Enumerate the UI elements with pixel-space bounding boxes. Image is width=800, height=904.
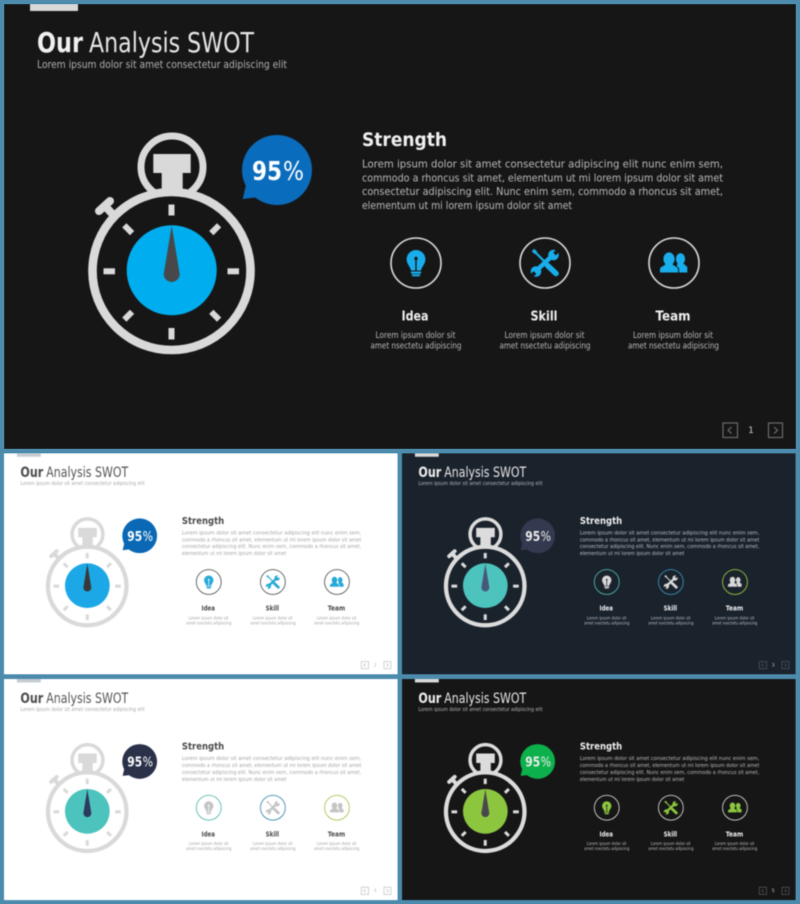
item: Skill: amet nsectetu adipiscing bbox=[648, 846, 694, 851]
item: Skill: Lorem ipsum dolor sit bbox=[253, 615, 293, 620]
item: Team: amet nsectetu adipiscing bbox=[712, 621, 758, 626]
item: Team: Team bbox=[726, 830, 743, 838]
item: Skill bbox=[648, 570, 694, 626]
text block: description: elementum ut mi lorem ipsum dolor sit amet bbox=[580, 551, 684, 557]
subtitle: Lorem ipsum dolor sit amet consectetur adipiscing elit bbox=[20, 481, 145, 487]
pager: 5 bbox=[772, 888, 775, 894]
subtitle: Lorem ipsum dolor sit amet consectetur adipiscing elit bbox=[418, 707, 543, 713]
title bbox=[20, 465, 129, 481]
title: Our bbox=[418, 465, 441, 481]
item: Idea: Lorem ipsum dolor sit bbox=[376, 331, 456, 341]
item: Idea: amet nsectetu adipiscing bbox=[584, 846, 630, 851]
title bbox=[20, 691, 129, 707]
item: Skill bbox=[648, 795, 694, 851]
item: Idea: Lorem ipsum dolor sit bbox=[587, 841, 627, 846]
pager bbox=[759, 887, 789, 894]
item: Idea: Lorem ipsum dolor sit bbox=[189, 841, 229, 846]
panel: dark slide with green accent bbox=[402, 679, 796, 900]
item: Skill: Skill bbox=[664, 830, 677, 838]
item: Skill: Skill bbox=[530, 308, 558, 324]
title: Our bbox=[20, 691, 43, 707]
item: Idea: Idea bbox=[202, 830, 215, 838]
callout: 95% bubble bbox=[242, 135, 312, 205]
item: Skill: Lorem ipsum dolor sit bbox=[504, 331, 585, 341]
callout: 95% bubble: 95 bbox=[525, 530, 540, 545]
item: Team bbox=[314, 570, 360, 626]
text block: description bbox=[182, 756, 362, 783]
text block: description: Lorem ipsum dolor sit amet consectetur adipiscing elit nunc enim sem, bbox=[182, 756, 362, 762]
text block: description: commodo a rhoncus sit amet, elementum ut mi lorem ipsum dolor sit amet bbox=[362, 172, 723, 184]
item: Skill: Skill bbox=[266, 605, 279, 613]
text block: description: Lorem ipsum dolor sit amet consectetur adipiscing elit nunc enim sem, bbox=[182, 531, 362, 537]
icon: stopwatch bbox=[48, 745, 126, 851]
text block: description bbox=[580, 756, 760, 783]
tab marker bbox=[17, 679, 41, 682]
item: Skill: amet nsectetu adipiscing bbox=[250, 621, 296, 626]
item: Team: Lorem ipsum dolor sit bbox=[715, 841, 755, 846]
callout: 95% bubble: % bbox=[143, 755, 153, 770]
text block: description: consectetur adipiscing elit. Nunc enim sem, commodo a rhoncus sit amet, bbox=[580, 770, 760, 776]
title: Our bbox=[20, 465, 43, 481]
pager bbox=[361, 887, 391, 894]
heading: Strength: Strength bbox=[580, 742, 622, 753]
item: Team bbox=[712, 570, 758, 626]
callout: 95% bubble: 95 bbox=[127, 755, 142, 770]
item: Idea: Lorem ipsum dolor sit bbox=[587, 615, 627, 620]
item: Idea: amet nsectetu adipiscing bbox=[370, 342, 462, 352]
tab marker bbox=[17, 453, 41, 457]
callout: 95% bubble: % bbox=[283, 157, 304, 187]
item: Idea: amet nsectetu adipiscing bbox=[186, 621, 232, 626]
text block: description bbox=[362, 158, 723, 212]
item: Skill bbox=[500, 238, 590, 352]
panel: large dark slide with blue accent bbox=[4, 4, 796, 449]
heading: Strength: Strength bbox=[182, 742, 224, 753]
heading: Strength: Strength bbox=[182, 516, 224, 527]
item: Team: Lorem ipsum dolor sit bbox=[317, 615, 357, 620]
pager bbox=[759, 662, 789, 669]
text block: description bbox=[580, 531, 760, 557]
item: Idea bbox=[584, 795, 630, 851]
tab marker bbox=[415, 453, 439, 457]
title bbox=[37, 26, 255, 59]
callout: 95% bubble bbox=[122, 518, 157, 553]
pager: 3 bbox=[772, 663, 775, 669]
item: Skill: amet nsectetu adipiscing bbox=[500, 342, 590, 352]
callout: 95% bubble bbox=[520, 744, 555, 779]
subtitle: Lorem ipsum dolor sit amet consectetur adipiscing elit bbox=[20, 707, 145, 713]
item: Team: Team bbox=[328, 605, 345, 613]
title bbox=[418, 465, 527, 481]
item: Team: Lorem ipsum dolor sit bbox=[715, 615, 755, 620]
item: Idea bbox=[370, 238, 462, 352]
item: Idea: Lorem ipsum dolor sit bbox=[189, 615, 229, 620]
panel: white slide with teal accent bbox=[4, 679, 398, 900]
text block: description: commodo a rhoncus sit amet, elementum ut mi lorem ipsum dolor sit amet bbox=[580, 763, 759, 769]
icon: stopwatch bbox=[92, 136, 250, 350]
item: Skill: Skill bbox=[664, 605, 677, 613]
pager: 4 bbox=[374, 888, 377, 894]
title bbox=[418, 691, 527, 707]
callout: 95% bubble: 95 bbox=[127, 530, 142, 545]
text block: description: consectetur adipiscing elit. Nunc enim sem, commodo a rhoncus sit amet, bbox=[182, 770, 362, 776]
subtitle: Lorem ipsum dolor sit amet consectetur adipiscing elit bbox=[418, 481, 543, 487]
icon: stopwatch bbox=[446, 519, 524, 625]
item: Team bbox=[712, 795, 758, 851]
pager: 1 bbox=[748, 426, 754, 436]
callout: 95% bubble bbox=[520, 518, 555, 553]
item: Skill: Lorem ipsum dolor sit bbox=[651, 841, 691, 846]
item: Idea: Idea bbox=[600, 830, 613, 838]
text block: description: Lorem ipsum dolor sit amet consectetur adipiscing elit nunc enim sem, bbox=[580, 531, 760, 537]
title: Analysis SWOT bbox=[89, 26, 255, 59]
text block: description: Lorem ipsum dolor sit amet consectetur adipiscing elit nunc enim sem, bbox=[362, 158, 723, 170]
callout: 95% bubble: % bbox=[541, 530, 551, 545]
item: Skill: amet nsectetu adipiscing bbox=[648, 621, 694, 626]
text block: description: commodo a rhoncus sit amet, elementum ut mi lorem ipsum dolor sit amet bbox=[182, 538, 361, 544]
icon: stopwatch bbox=[446, 745, 524, 851]
pager bbox=[361, 662, 391, 669]
item: Team: Lorem ipsum dolor sit bbox=[633, 331, 714, 341]
panel: navy slide with teal accent bbox=[402, 453, 796, 674]
callout: 95% bubble: 95 bbox=[252, 157, 282, 187]
item: Team: Lorem ipsum dolor sit bbox=[317, 841, 357, 846]
title: Analysis SWOT bbox=[444, 691, 527, 707]
item: Team: amet nsectetu adipiscing bbox=[628, 342, 719, 352]
text block: description: Lorem ipsum dolor sit amet consectetur adipiscing elit nunc enim sem, bbox=[580, 756, 760, 762]
callout: 95% bubble bbox=[122, 744, 157, 779]
text block: description: commodo a rhoncus sit amet, elementum ut mi lorem ipsum dolor sit amet bbox=[182, 763, 361, 769]
panel: white slide with blue accent bbox=[4, 453, 398, 674]
item: Skill bbox=[250, 795, 296, 851]
pager bbox=[723, 423, 782, 438]
item: Idea: Idea bbox=[202, 605, 215, 613]
item: Team bbox=[314, 795, 360, 851]
item: Team: amet nsectetu adipiscing bbox=[314, 621, 360, 626]
pager: 2 bbox=[374, 663, 377, 669]
item: Skill bbox=[250, 570, 296, 626]
text block: description: elementum ut mi lorem ipsum dolor sit amet bbox=[362, 200, 572, 212]
text block: description: consectetur adipiscing elit. Nunc enim sem, commodo a rhoncus sit amet, bbox=[182, 544, 362, 550]
text block: description bbox=[182, 531, 362, 557]
title: Analysis SWOT bbox=[444, 465, 527, 481]
item: Idea: amet nsectetu adipiscing bbox=[186, 846, 232, 851]
item: Team: Team bbox=[656, 308, 690, 324]
item: Team: Team bbox=[328, 830, 345, 838]
text block: description: consectetur adipiscing elit. Nunc enim sem, commodo a rhoncus sit amet, bbox=[580, 544, 760, 550]
title: Analysis SWOT bbox=[46, 691, 129, 707]
title: Analysis SWOT bbox=[46, 465, 129, 481]
item: Skill: Lorem ipsum dolor sit bbox=[651, 615, 691, 620]
text block: description: elementum ut mi lorem ipsum dolor sit amet bbox=[182, 777, 286, 783]
icon: stopwatch bbox=[48, 519, 126, 625]
callout: 95% bubble: % bbox=[541, 755, 551, 770]
item: Skill: Skill bbox=[266, 830, 279, 838]
heading: Strength: Strength bbox=[580, 516, 622, 527]
heading: Strength: Strength bbox=[362, 129, 447, 151]
callout: 95% bubble: 95 bbox=[525, 755, 540, 770]
text block: description: commodo a rhoncus sit amet, elementum ut mi lorem ipsum dolor sit amet bbox=[580, 538, 759, 544]
item: Idea bbox=[186, 570, 232, 626]
item: Team: amet nsectetu adipiscing bbox=[314, 846, 360, 851]
item: Idea: Idea bbox=[600, 605, 613, 613]
text block: description: elementum ut mi lorem ipsum dolor sit amet bbox=[182, 551, 286, 557]
item: Skill: Lorem ipsum dolor sit bbox=[253, 841, 293, 846]
item: Idea: Idea bbox=[402, 308, 428, 324]
title: Our bbox=[418, 691, 441, 707]
item: Team bbox=[628, 238, 719, 352]
item: Team: amet nsectetu adipiscing bbox=[712, 846, 758, 851]
subtitle: Lorem ipsum dolor sit amet consectetur adipiscing elit bbox=[37, 59, 287, 71]
title: Our bbox=[37, 26, 83, 59]
item: Idea: amet nsectetu adipiscing bbox=[584, 621, 630, 626]
text block: description: elementum ut mi lorem ipsum dolor sit amet bbox=[580, 777, 684, 783]
item: Team: Team bbox=[726, 605, 743, 613]
text block: description: consectetur adipiscing elit. Nunc enim sem, commodo a rhoncus sit amet, bbox=[362, 186, 723, 198]
item: Idea bbox=[584, 570, 630, 626]
callout: 95% bubble: % bbox=[143, 530, 153, 545]
tab marker bbox=[415, 679, 439, 682]
item: Idea bbox=[186, 795, 232, 851]
item: Skill: amet nsectetu adipiscing bbox=[250, 846, 296, 851]
tab marker bbox=[30, 4, 78, 11]
